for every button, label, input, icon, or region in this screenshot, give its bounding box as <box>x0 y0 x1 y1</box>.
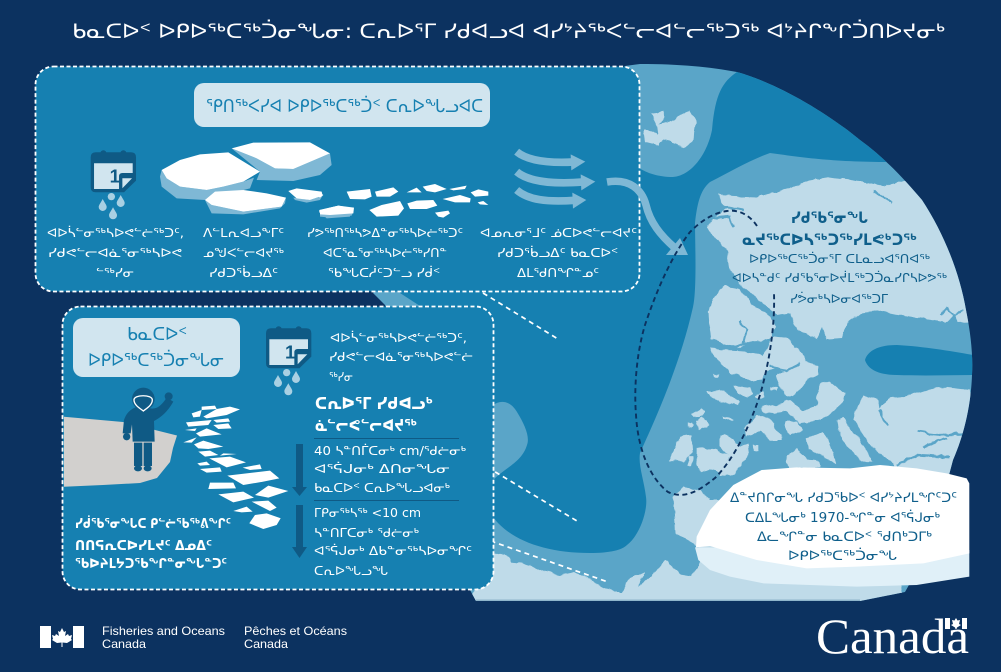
text: 40 cm per decade <box>314 442 466 495</box>
callout: ice extent text: ᓯᑯᖃᕐᓂᖓ <box>791 209 868 227</box>
panel heading <box>73 318 240 377</box>
text: traditional knowledge <box>75 516 231 572</box>
dashed line: upper callout leader <box>483 293 558 339</box>
text: less than 10 cm: ᒥᑭᓂᖅᓴᖅ <10 cm <box>314 505 421 520</box>
panel heading <box>194 83 490 127</box>
illustration: broken ice floes <box>317 184 488 218</box>
dashed ellipse: ice extent region <box>635 211 774 495</box>
text: 40 cm per decade: 40 ᓴᓐᑎᒦᑕᓂᒃ cm/ᖁᓖᓂᒃ <box>314 442 466 458</box>
text: traditional knowledge: ᓯᑰᖃᕐᓂᖓᑕ ᑭᓪᓖᖃᖅᕕᖏᑦ <box>75 516 231 532</box>
land masses <box>470 110 985 610</box>
text: warmer temperatures <box>47 224 184 280</box>
arrow: wind ice flow to archipelago <box>607 181 688 255</box>
text: warmer temperatures <box>329 329 473 384</box>
subheading: sea ice decreasing: ᑕᕆᐅᕐᒥ ᓯᑯᐊᓗᒃ <box>315 394 433 413</box>
text: warmer temperatures: ᖅᓯᓂ <box>329 369 353 384</box>
callout: ice extent text <box>732 209 947 306</box>
arrow: decline 1 <box>292 444 307 496</box>
panel heading: ᕿᑎᖅᐸᓯᐊ ᐅᑭᐅᖅᑕᖅᑑᑉ ᑕᕆᐅᖓᓗᐊᑕ <box>206 96 483 117</box>
text: more open water <box>307 225 463 280</box>
icon: calendar with rain: 1 <box>110 165 120 186</box>
text: thinner ice: ᓄᖑᐸᓪᓕᐊᔪᖅ <box>203 245 284 260</box>
callout: ice extent text: ᓇᔪᖅᑕᐅᓴᖅᑐᖅᓯᒪᕙᒃᑐᖅ <box>742 231 917 249</box>
dashed line: middle callout leader <box>472 458 577 521</box>
callout: iceberg with text: ᐃᓐᔪᑎᒋᓂᖓ ᓯᑯᑐᖃᐅᑉ ᐊᓯᔾᔨᓯᒪᖏᑦᑐᑦ <box>730 491 957 506</box>
subheading: sea ice decreasing: ᓈᓪᓕᕙᓪᓕᐊᔪᖅ <box>315 416 417 435</box>
text: more open water: ᓯᕗᖅᑎᖅᓴᕗᐃᓐᓂᖅᓴᐅᓖᖅᑐᑦ <box>307 225 463 240</box>
icon: person waving <box>123 388 173 471</box>
callout: iceberg with text: ᐃᓚᖏᓐᓂ ᑲᓇᑕᐅᑉ ᖁᑎᒃᑐᒥᒃ <box>757 530 932 545</box>
callout: iceberg with text: ᐅᑭᐅᖅᑕᖅᑑᓂᖓ <box>788 547 897 564</box>
text: more open water: ᐊᑕᕐᓇᕐᓂᖅᓴᐅᓖᖅᓯᑎᓐ <box>323 245 447 260</box>
text: warmer temperatures: ᐊᐅᓵᓪᓂᖅᓴᐅᕙᓪᓖᖅᑐᑦ, <box>47 224 184 240</box>
text: winds move ice: ᓯᑯᑐᖄᓗᐃᑦ ᑲᓇᑕᐅᑉ <box>497 244 618 260</box>
subheading: sea ice decreasing <box>315 394 433 435</box>
text: traditional knowledge: ᖃᐅᔨᒪᔭᑐᖃᖏᓐᓂᖓᓐᑐᑦ <box>75 557 227 572</box>
title: ᑲᓇᑕᐅᑉ ᐅᑭᐅᖅᑕᖅᑑᓂᖓᓂ: ᑕᕆᐅᕐᒥ ᓯᑯᐊᓗᐊ ᐊᓯᔾᔨᖅᐸᓪᓕᐊᓪᓕᖅᑐᖅ ᐊᔾᔨᒋᖕᒋᑑᑎᐅᔪᓂᒃ <box>72 19 945 43</box>
text: less than 10 cm: ᓴᓐᑎᒥᑕᓂᒃ ᖁᓖᓂᒃ <box>314 525 419 540</box>
department name English: Fisheries and Oceans <box>102 624 225 638</box>
callout: ice extent text: ᐅᑭᐅᖅᑕᖅᑑᓂᕐᒥ ᑕᒪᓇᓗᐊᕐᑎᐊᖅ <box>749 250 930 266</box>
panel: causes <box>36 66 640 292</box>
illustration: shore land <box>64 417 177 487</box>
logo: Canada wordmark: Canada <box>816 608 969 664</box>
department name French <box>244 624 347 651</box>
map of Canadian Arctic <box>373 64 972 601</box>
text: winds move ice: ᐃᒪᖁᑎᖏᓐᓄᑦ <box>517 265 599 280</box>
icon: calendar with rain: 1 <box>285 341 295 362</box>
panel: Canadian Arctic effects <box>62 306 494 590</box>
panel heading: ᐅᑭᐅᖅᑕᖅᑑᓂᖓᓂ <box>88 350 224 371</box>
dashed line: bottom callout leader <box>482 538 608 582</box>
text: more open water: ᖃᖓᑕᓲᑦᑐᓪᓗ ᓯᑰᑉ <box>328 264 440 280</box>
department name French: Canada <box>244 637 288 651</box>
icon: calendar with rain <box>91 150 136 219</box>
text: less than 10 cm <box>314 505 472 578</box>
text: winds move ice: ᐊᓄᕆᓂᕐᒧᑦ ᓅᑕᐅᕙᓪᓕᐊᔪᑦ <box>480 225 637 240</box>
callout: ice extent text: ᓯᕘᓂᒃᓴᐅᓂᐊᖅᑐᒥ <box>790 290 888 306</box>
arrow: decline 2 <box>292 505 307 558</box>
text: less than 10 cm: ᑕᕆᐅᖓᓗᖓ <box>314 563 388 578</box>
text: winds move ice <box>480 225 637 280</box>
text: warmer temperatures: ᓯᑯᕙᓪᓕᐊᓈᕐᓂᖅᓴᐅᕙ <box>48 245 182 260</box>
text: warmer temperatures: ᐊᐅᓵᓪᓂᖅᓴᐅᕙᓪᓖᖅᑐᑦ, <box>330 329 467 345</box>
illustration: trail of ice floes <box>183 406 288 529</box>
department name English: Canada <box>102 637 146 651</box>
department name English <box>102 624 225 651</box>
callout: iceberg with text: ᑕᐃᒪᖓᓂᒃ 1970-ᖏᓐᓂ ᐊᕐᕌᒍᓂᒃ <box>745 509 940 526</box>
text: less than 10 cm: ᐊᕐᕌᒍᓂᒃ ᐃᑲᓐᓂᖅᓴᐅᓂᖏᑦ <box>314 542 472 558</box>
callout: ice extent text: ᐊᐅᓴᓐᑯᑦ ᓯᑯᖃᕐᓂᐅᔫᒪᖅᑐᑑᓇᓯᒋᓴᐅᕗᖅ <box>732 269 947 285</box>
callout: iceberg with text <box>695 465 969 587</box>
text: 40 cm per decade: ᑲᓇᑕᐅᑉ ᑕᕆᐅᖓᓗᐊᓂᒃ <box>314 480 450 495</box>
text: thinner ice: ᐱᓪᒪᕆᐊᓗᖕᒥᑦ <box>203 225 284 240</box>
panel heading: ᑲᓇᑕᐅᑉ <box>127 324 187 345</box>
text: warmer temperatures: ᓯᑯᕙᓪᓕᐊᓈᕐᓂᖅᓴᐅᕙᓪᓖ <box>329 349 473 364</box>
text: 40 cm per decade: ᐊᕐᕌᒍᓂᒃ ᐃᑎᓂᖓᓂ <box>314 460 450 476</box>
text: thinner ice <box>203 225 284 280</box>
icon: calendar with rain <box>266 326 311 395</box>
text: warmer temperatures: ᓪᖅᓯᓂ <box>96 265 134 280</box>
text: thinner ice: ᓯᑯᑐᖄᓗᐃᑦ <box>209 264 278 280</box>
text: traditional knowledge: ᑎᑎᕋᕆᑕᐅᓯᒪᔪᑦ ᐃᓄᐃᑦ <box>75 539 212 554</box>
illustration: large ice floes <box>160 142 350 218</box>
logo: Government of Canada flag <box>40 626 84 648</box>
icon: wind arrows <box>517 152 595 209</box>
department name French: Pêches et Océans <box>244 624 347 638</box>
